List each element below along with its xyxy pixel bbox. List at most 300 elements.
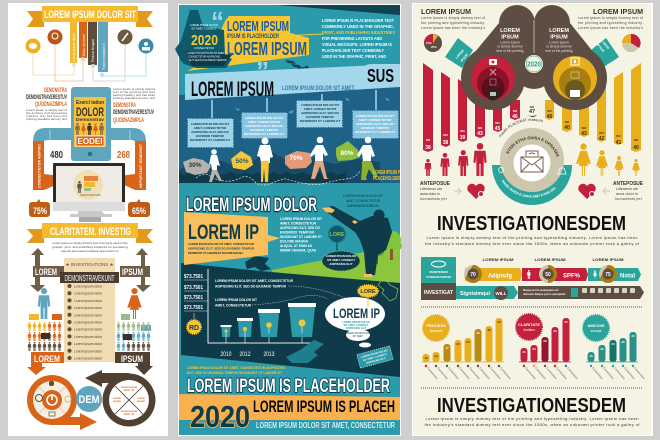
panel: left poster	[8, 3, 168, 436]
intro text	[52, 241, 128, 253]
dotted divider	[421, 307, 643, 388]
teal tag: ADIPISCING ELIT	[366, 357, 387, 365]
right text block: setting industry text has been	[113, 93, 155, 97]
callout 3	[297, 101, 342, 127]
DEM circle	[76, 386, 102, 412]
chart legend dots and labels: Consectetur	[591, 366, 604, 380]
callout 2	[242, 113, 287, 138]
header badge 2020: CONSECTETUR	[194, 46, 214, 50]
corner stripe	[277, 5, 400, 15]
arrow headings	[482, 257, 624, 262]
header paragraph: COMMONLY USED IN THE GRAPHIC,	[322, 24, 395, 30]
binocular labels	[497, 28, 573, 53]
chart annotation text: LOREM IPSUM DOLOR SIT	[215, 298, 258, 302]
section paragraph: Lorem Ipsum is simply dummy text of the printing and typesetting industry. Lorem Ipsum has been	[426, 235, 638, 240]
arrow row one	[465, 268, 641, 281]
chart legend dots and labels: Consectetur	[545, 366, 558, 380]
callout 1: INCIDIDUNT UT LABORE ET	[190, 138, 230, 142]
callout 1: LOREM IPSUM DOLOR SIT	[191, 122, 229, 126]
yellow bar chart: 14	[434, 354, 438, 358]
top right text: the printing and typesetting industry.	[578, 21, 643, 25]
red bars: 45	[495, 126, 500, 132]
central list: Lorem ipsum dolor	[74, 292, 103, 296]
central list: Lorem ipsum dolor	[74, 313, 103, 317]
year labels: 2010	[220, 352, 232, 358]
icon circles	[26, 30, 154, 54]
white cloud callout: LOREM IP	[333, 305, 380, 321]
second ribbon heading: CLARITATEM. INVESTIG	[50, 226, 131, 238]
brown arrows: IPSUM	[122, 267, 143, 277]
vertical tabs: Pharus feugiat	[91, 39, 95, 62]
chart legend dots and labels: Consectetur	[478, 366, 491, 380]
chevron arrows	[285, 60, 312, 74]
binocular labels: IPSUM	[501, 34, 519, 40]
red bars: NO	[443, 133, 448, 137]
teal bar chart: AMCOIIS	[587, 323, 605, 328]
yellow bar chart: 43	[497, 320, 501, 324]
RD burst: RD	[189, 325, 199, 332]
teal bar chart: 24	[611, 342, 615, 346]
percent blobs: 80%	[340, 150, 354, 157]
vertical tabs: Turpis volutpat in	[102, 43, 106, 70]
phone: Exerci tation	[76, 100, 104, 106]
header yellow title block: IPSUM IS PLACEHOLDER	[227, 34, 279, 40]
yellow bars: NO	[599, 131, 604, 135]
right text block	[113, 87, 156, 124]
yellow bars: 42	[599, 136, 604, 142]
panel: middle poster	[175, 4, 402, 436]
chart annotation text: LOREM IPSUM DOLOR SIT AMET, CONSECTETUR	[215, 279, 294, 283]
yellow text lines: ELIT, SED DO EIUSMOD TEMPOR INCIDIDUNT UT LABORE ET	[187, 371, 283, 375]
binocular labels: Lorem Ipsum	[549, 40, 569, 44]
light blue banner: LOREM IPSUM	[191, 78, 274, 101]
red bar chart: 29	[543, 339, 547, 343]
right text block: Lorem ipsum is simply dummy	[113, 87, 156, 91]
right caption: humanitats per	[615, 197, 643, 201]
LORE burst: LORE	[329, 232, 345, 238]
left text block	[26, 88, 67, 121]
year labels	[220, 352, 308, 358]
percent blobs	[183, 141, 360, 175]
header paragraph: PLACEHOLDER TEXT COMMONLY	[322, 48, 385, 54]
white paragraph: INCIDIDUNT UT LABORE ET	[280, 235, 323, 239]
white cloud callout	[325, 297, 385, 348]
dark chart background	[181, 263, 400, 377]
arrow headings: LOREM IPSUM	[534, 257, 566, 262]
white cloud callout: ADIPISCING ELIT	[346, 327, 367, 330]
yellow bars: 40	[564, 125, 570, 131]
trees	[370, 231, 402, 264]
yellow text lines: LOREM IPSUM DOLOR SIT AMET, CONSECTETUR ADIPISCING	[187, 366, 285, 370]
teal ribbons: LOREM	[600, 39, 611, 50]
big 2020: 2020	[190, 399, 250, 434]
central list: Lorem ipsum dolor	[74, 299, 103, 303]
yellow lens	[553, 56, 597, 100]
red bars: NO	[426, 138, 431, 142]
binocular labels: is simply dummy	[497, 44, 523, 48]
number 47: 47	[529, 109, 535, 115]
yellow bar chart: 21	[456, 342, 460, 346]
percent bubbles	[29, 199, 150, 217]
yellow bar chart: PROCESS	[426, 323, 446, 328]
red bar chart: 21	[522, 350, 526, 354]
red bars: 38	[443, 140, 448, 146]
teal chevrons	[286, 340, 324, 363]
white paragraph: LOREM IPSUM DOLOR SIT	[280, 217, 323, 221]
arrow row one: Adipisdg	[488, 274, 512, 280]
left text block: industry text has been the	[26, 114, 67, 118]
vertical tabs: Dolor sit amet	[82, 34, 86, 56]
top right text	[578, 9, 643, 30]
intro text: layouts and visual mockups lorem ipsum is	[62, 249, 119, 253]
light blue banner: SUS	[367, 66, 394, 86]
yellow bar chart	[421, 315, 504, 362]
right caption: Litterarum ute	[616, 187, 638, 191]
phone	[71, 87, 111, 161]
left caption: humanitats per	[420, 197, 448, 201]
header badge 2020: SIT AMET CONSECT	[191, 26, 217, 30]
curved captions: maulin PLACERAT massum	[499, 118, 543, 138]
section title: INVESTIGATIONESDEM	[437, 213, 626, 235]
teal bar chart: 32	[631, 334, 635, 338]
left caption	[420, 181, 451, 201]
yellow sign: ADIPISCING ELIT, SED DO EIUSMOD TEMPOR	[188, 246, 254, 250]
chart legend dots and labels	[425, 365, 646, 380]
teal tag: LOREM IPSUM DOLOR	[361, 349, 388, 359]
orange and brown labelled arrows: IPSUM	[121, 354, 143, 364]
arrow row two	[456, 286, 644, 300]
dark burst label: ADIPISCING ELIT	[329, 262, 353, 266]
header badge 2020: 2020	[191, 32, 218, 49]
callout stems	[212, 90, 376, 118]
lower section title: LOREM IPSUM DOLOR	[186, 195, 317, 216]
dark burst label	[322, 251, 360, 271]
teal top right text: AMET, CONSECTETUR	[346, 199, 381, 203]
chart annotation text: ADIPISCING ELIT, SED DO EIUSMOD TEMPOR	[215, 284, 287, 288]
arrow row two: WILL	[495, 291, 507, 296]
yellow bars: 46	[547, 114, 552, 120]
yellow scene caption: LOREM IPSUM P	[373, 170, 400, 176]
yellow sign: LOREM IPSUM DOLOR SIT AMET, CONSECTETUR	[188, 242, 254, 246]
teal bar chart: 20	[600, 347, 604, 351]
chart legend dots and labels: Consectetur	[534, 366, 547, 380]
scene background	[179, 80, 400, 183]
phone: Demonstrav	[76, 117, 105, 122]
left text block: DEMONSTRAVERESTUV	[26, 95, 67, 101]
arrow headings: LOREM IPSUM	[592, 257, 624, 262]
left caption: ANTEPOSUE	[420, 181, 451, 187]
top left text: Lorem Ipsum is simply dummy text of	[421, 16, 485, 20]
white paragraph: DOLORE MAGNA	[280, 240, 308, 244]
brown box	[421, 283, 456, 300]
chart legend dots and labels: Consectetur	[499, 366, 512, 380]
top ribbon heading: LOREM IPSUM DOLOR SIT	[44, 9, 136, 21]
cup chart	[220, 303, 316, 343]
section paragraph: the industry's standard dummy text ever since the 1500s, when an unknown printer took a galley of	[425, 241, 640, 246]
top left text: LOREM IPSUM	[421, 9, 471, 16]
red bars: 39	[460, 135, 465, 141]
white cloud callout: LOREM IPSUM DOLOR	[342, 321, 370, 324]
callout 3: INCIDIDUNT UT LABORE ET	[300, 119, 340, 123]
arrow row one: SPF%	[563, 274, 581, 280]
header yellow title block: LOREM IPSUM	[227, 18, 289, 35]
brown ring diagram: Lorem	[113, 396, 122, 400]
teal box: MAINTENEM	[429, 270, 448, 274]
callout 4: LOREM IPSUM DOLOR SIT	[356, 114, 394, 118]
white paragraph: EIUSMOD TEMPOR	[280, 230, 314, 234]
chart legend dots and labels: Consectetur	[566, 366, 579, 380]
header yellow title block	[187, 16, 324, 71]
binocular labels: text of the printing	[497, 49, 524, 53]
yellow bars: NO	[547, 109, 552, 113]
yellow bar chart: 24	[466, 340, 470, 344]
header paragraph: FOR PREVIEWING LAYOUTS AND	[322, 36, 382, 42]
curved captions	[499, 118, 560, 198]
brown ring diagram: Lorem ipsum	[121, 409, 138, 413]
second ribbon heading	[27, 223, 153, 243]
brown arrows	[30, 248, 151, 292]
yellow bars: NO	[616, 134, 621, 138]
RD burst	[187, 313, 201, 334]
right text block: printing standard dummy text	[113, 96, 155, 100]
chart legend dots and labels: Consectetur	[447, 366, 460, 380]
central list: Lorem ipsum dolor	[74, 306, 103, 310]
header paragraph	[322, 18, 396, 60]
red bars	[423, 63, 520, 152]
left text block: DEMONSTRA	[44, 88, 67, 94]
callout 4: AMET, CONSECTETUR	[359, 118, 392, 122]
quote marks: “	[211, 6, 224, 36]
yellow sign	[184, 212, 280, 265]
red bar chart: CLARITATE	[518, 322, 540, 327]
yellow scene caption	[373, 170, 400, 182]
teal half ring	[492, 165, 572, 205]
dashed path	[196, 171, 360, 185]
year labels: 2012	[240, 352, 251, 358]
chart axes	[208, 269, 314, 343]
top left text: Lorem Ipsum has been the industry's	[421, 26, 485, 30]
header paragraph: PRINT, AND PUBLISHING INDUSTRIES	[322, 30, 396, 36]
central list: Lorem ipsum dolor	[74, 356, 103, 360]
callout 3: EIUSMOD TEMPOR	[306, 115, 335, 119]
top right text: LOREM IPSUM	[593, 9, 643, 16]
percent bubbles: 65%	[132, 206, 146, 216]
central list: Lorem ipsum dolor	[74, 284, 103, 288]
central list: DEMONSTRAVEKUNT	[64, 274, 115, 283]
central list: Lorem ipsum dolor	[74, 328, 103, 332]
central list: Lorem ipsum dolor	[74, 320, 103, 324]
callout 4: ADIPISCING ELIT, SED DO	[356, 122, 395, 126]
brown ring diagram: dolor sit	[124, 388, 134, 392]
teal ribbons: IPSUM	[460, 52, 469, 63]
curved captions: MAED OUISA E OKRA ANO 8 ANG DIA	[502, 180, 556, 198]
right text block: DEMONSTRAVERESTUV	[113, 110, 154, 116]
brown ring diagram	[85, 370, 156, 426]
binocular labels: LOREM	[500, 28, 520, 34]
DEM circle: DEM	[78, 394, 100, 406]
yellow bar chart: 36	[487, 328, 491, 332]
chart annotation text	[215, 279, 350, 308]
right text block: text of the printing and type	[113, 90, 155, 94]
binocular labels: text of the printing	[546, 49, 573, 53]
pie charts: 25%	[431, 45, 437, 49]
teal ribbons: IPSUM	[596, 43, 606, 53]
brown ring diagram: Lorem ipsum	[121, 385, 138, 389]
callout 2: INCIDIDUNT UT LABORE ET	[244, 132, 284, 136]
header badge 2020: LOREM IPSUM DOLOR	[190, 23, 218, 27]
orange hands and bars	[33, 141, 146, 190]
yellow bars: NO	[634, 138, 639, 142]
bottom paragraph: Lorem Ipsum is simply dummy text of the printing and typesetting industry. Lorem Ipsum has been	[426, 416, 638, 421]
teal box: CONSUETUDIUM	[426, 275, 451, 279]
callout 1: EIUSMOD TEMPOR	[196, 134, 225, 138]
arrow row two: dolorem Neque porro quisquam	[523, 292, 566, 296]
brown ring diagram: ipsum	[137, 399, 146, 403]
red bar chart	[516, 314, 571, 362]
people grid right	[117, 314, 151, 351]
callout 1: ADIPISCING ELIT, SED DO	[191, 130, 230, 134]
binocular labels: LOREM	[549, 28, 569, 34]
brown ring diagram: ipsum	[113, 399, 122, 403]
binocular labels: is simply dummy	[546, 44, 572, 48]
central list: Lorem ipsum dolor	[74, 335, 103, 339]
money labels: $73.7501	[184, 305, 203, 311]
white paragraph: MINIM VENIAM, QUIS	[280, 248, 317, 252]
header paragraph: VISUAL MOCKUPS. LOREM IPSUM IS	[322, 42, 393, 48]
numbers 480 and 268: 268	[117, 150, 130, 161]
teal top right text: LOREM IPSUM DOLOR SIT	[343, 194, 383, 198]
red bars: 43	[477, 131, 483, 137]
arrow row two: Neque porro quisquam est	[523, 288, 559, 292]
yellow LORE burst	[358, 285, 378, 307]
callout 4	[353, 111, 398, 138]
numbers 480 and 268: 480	[50, 150, 63, 161]
white cloud callout: LOREM IPSUM DOLOR	[346, 333, 371, 335]
arrow row two: Signisimqui	[460, 291, 490, 297]
chart annotation text: AMET, CONSECTETUR	[215, 304, 252, 308]
right caption: ANTEPOSUE	[613, 181, 644, 187]
money labels: $73.7501	[184, 295, 203, 301]
central list: ★ INVESTIGATIONS ★	[66, 262, 114, 267]
teal tag: SIT AMET, CONSECT	[363, 353, 388, 362]
yellow sign: LOREM IP	[188, 221, 259, 244]
callout 3: ADIPISCING ELIT, SED DO	[301, 111, 340, 115]
number 47	[527, 105, 537, 117]
teal top right text: ADIPISCING ELIT, SED DO	[347, 204, 380, 208]
yellow sign: INCIDIDUNT UT LABORE ET DOLORE MAGNA	[188, 251, 243, 255]
brown arrows: LOREM	[35, 267, 57, 277]
chart legend dots and labels: Consectetur	[555, 366, 568, 380]
central list: Lorem ipsum dolor	[74, 349, 103, 353]
center circle with envelope	[500, 128, 564, 192]
yellow bars: 43	[581, 131, 587, 137]
callout 2: AMET, CONSECTETUR	[248, 120, 281, 124]
callout 1: AMET, CONSECTETUR	[194, 126, 227, 130]
chart legend dots and labels: Consectetur	[489, 366, 502, 380]
central list	[60, 258, 119, 362]
header paragraph: LOREM IPSUM IS PLACEHOLDER TEXT	[322, 18, 394, 24]
brown ring diagram: dolor sit	[124, 412, 134, 416]
white paragraph	[280, 217, 323, 252]
yellow bar chart: dynamic	[429, 329, 443, 333]
numbers 480 and 268	[50, 150, 130, 161]
red bar chart: 24	[532, 347, 536, 351]
white paragraph: ALIQUA. UT ENIM AD	[280, 244, 312, 248]
brown ring diagram: Lorem	[137, 396, 146, 400]
pie charts: 15%	[426, 41, 432, 45]
chart legend dots and labels: Consectetur	[426, 366, 439, 380]
callout 3: AMET, CONSECTETUR	[304, 107, 337, 111]
chart legend dots and labels: Consectetur	[468, 366, 481, 380]
callout 2: ADIPISCING ELIT, SED DO	[245, 124, 284, 128]
left caption: anna dolor in	[420, 192, 440, 196]
teal tag	[357, 346, 393, 368]
gauges: 70	[470, 272, 476, 278]
red bar chart: 50	[564, 320, 568, 324]
vertical tabs	[70, 22, 108, 77]
red bar chart: insitam	[523, 328, 535, 332]
chart legend dots and labels: Consectetur	[524, 366, 537, 380]
yellow bars: NO	[565, 120, 570, 124]
orange ring diagram	[27, 375, 97, 430]
binocular labels: IPSUM	[550, 34, 568, 40]
teal box	[421, 257, 456, 283]
yellow bars	[545, 63, 641, 152]
2020 badge	[525, 55, 543, 73]
orange hands and bars: IMPORTANT DEMONST	[139, 143, 143, 188]
dark burst label: LOREM IPSUM DOLOR	[326, 254, 356, 258]
percent blobs: 70%	[289, 155, 303, 162]
connector lines	[33, 45, 146, 81]
header badge 2020	[175, 10, 232, 68]
red bars: NO	[478, 126, 483, 130]
year labels: 2013	[264, 352, 275, 358]
orange hands and bars: CONSECTETUR ADIPISC	[38, 144, 42, 188]
gauges	[464, 265, 617, 283]
gauges: 75	[605, 272, 611, 278]
big white title: LOREM IPSUM IS PLACEHOLDER	[187, 376, 390, 397]
top ribbon heading	[27, 6, 153, 27]
header yellow title block: LOREM IPSUM	[227, 39, 307, 59]
top left text	[421, 9, 485, 30]
binocular labels: Lorem Ipsum	[500, 40, 520, 44]
chart legend dots and labels: Consectetur	[633, 366, 646, 380]
panel: right poster	[412, 3, 653, 436]
figures: man and woman	[38, 288, 142, 319]
money labels: $73.7501	[184, 274, 203, 280]
red bars: 46	[512, 114, 518, 120]
people grid left	[28, 314, 62, 351]
top right text: Lorem Ipsum has been the industry's	[578, 26, 643, 30]
left caption: Litterarum ute	[420, 187, 442, 191]
intro text: graphic, print, and publishing industries for previewing	[52, 245, 128, 249]
chart legend dots and labels: Consectetur	[602, 366, 615, 380]
orange bottom band	[179, 394, 400, 420]
LORE burst	[329, 226, 345, 251]
left text block: the printing and typesetting	[26, 111, 67, 115]
teal bar chart: 26	[621, 340, 625, 344]
section paragraph	[425, 235, 640, 246]
header paragraph: USED IN THE GRAPHIC, PRINT, AND	[322, 54, 386, 60]
callout 2: EIUSMOD TEMPOR	[250, 128, 279, 132]
chart legend dots and labels: Consectetur	[436, 366, 449, 380]
yellow human figures	[576, 143, 640, 176]
teal bar chart: suscipi	[591, 329, 602, 333]
white cloud callout: SIT AMET	[353, 335, 364, 338]
left text block: Lorem ipsum is simply text of	[26, 108, 67, 112]
black title: LOREM IPSUM IS PLACEH	[253, 397, 395, 416]
bottom title: INVESTIGATIONESDEM	[437, 395, 626, 417]
